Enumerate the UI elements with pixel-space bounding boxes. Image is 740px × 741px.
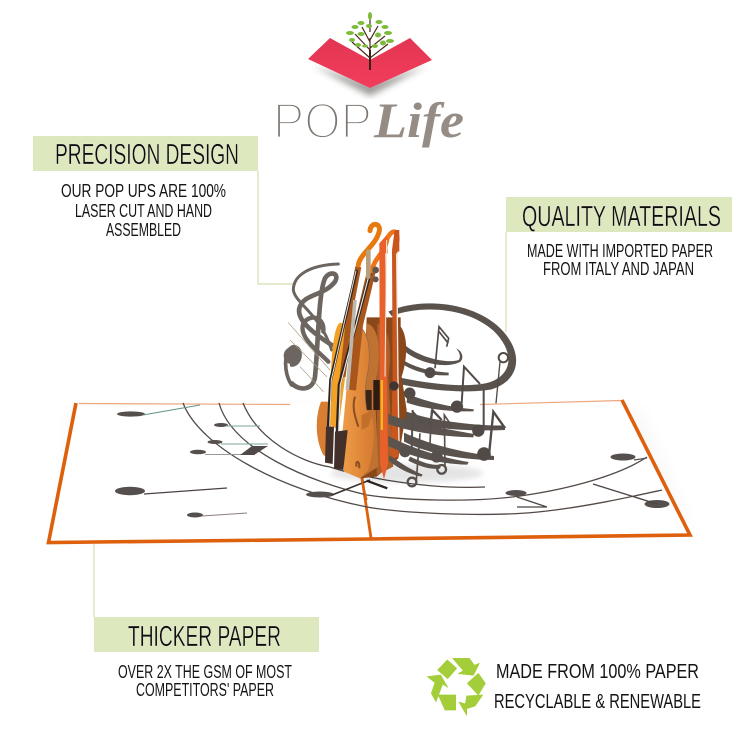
precision design heading: PRECISION DESIGN <box>55 139 239 171</box>
thicker paper heading: THICKER PAPER <box>128 621 281 653</box>
necks and fingerboards <box>328 267 372 432</box>
treble clef <box>284 264 338 392</box>
front violin body <box>328 323 374 478</box>
music staves front <box>388 414 474 477</box>
standing bows <box>379 230 399 479</box>
logo tree <box>346 12 394 70</box>
precision design text <box>61 181 226 240</box>
pop-up card base <box>47 400 692 543</box>
logo wordmark POP: POP <box>273 93 372 149</box>
bridges dark tailpieces <box>325 427 348 470</box>
thicker paper text <box>118 662 292 700</box>
printed dark beam <box>367 481 387 488</box>
card shadow <box>60 410 690 540</box>
bow tip on card <box>362 480 367 500</box>
logo wordmark Life: Life <box>373 92 464 148</box>
quality materials text <box>527 241 713 279</box>
callout: recyclable <box>494 660 701 713</box>
scrolls <box>358 224 397 282</box>
printed staff lines <box>183 403 662 514</box>
card orange border <box>48 400 690 542</box>
soft shadow <box>330 464 483 483</box>
precision design text: OUR POP UPS ARE 100% <box>61 181 226 201</box>
icon: recycling arrows <box>427 658 485 715</box>
music staves behind <box>388 303 516 460</box>
callout: thicker paper <box>94 617 319 700</box>
card far edge <box>79 400 622 404</box>
back violin bodies <box>317 317 407 478</box>
callout: precision design <box>33 136 258 240</box>
notes front <box>399 410 453 486</box>
logo red open book <box>308 38 432 96</box>
precision design text: LASER CUT AND HAND <box>75 201 212 221</box>
thicker paper text: COMPETITORS' PAPER <box>136 680 274 700</box>
callout: quality materials <box>506 197 732 279</box>
precision design heading <box>33 136 258 171</box>
precision design text: ASSEMBLED <box>106 220 181 240</box>
left panel <box>47 403 370 543</box>
printed notes left <box>115 405 370 518</box>
violin and music pop-up <box>284 224 516 500</box>
leader lines <box>94 171 506 617</box>
right panel <box>362 400 692 539</box>
thicker paper text: OVER 2X THE GSM OF MOST <box>118 662 292 682</box>
logo: Pop Life <box>273 12 464 149</box>
floating notes <box>404 327 508 461</box>
printed notes right <box>506 454 670 508</box>
thicker paper heading <box>94 617 319 653</box>
